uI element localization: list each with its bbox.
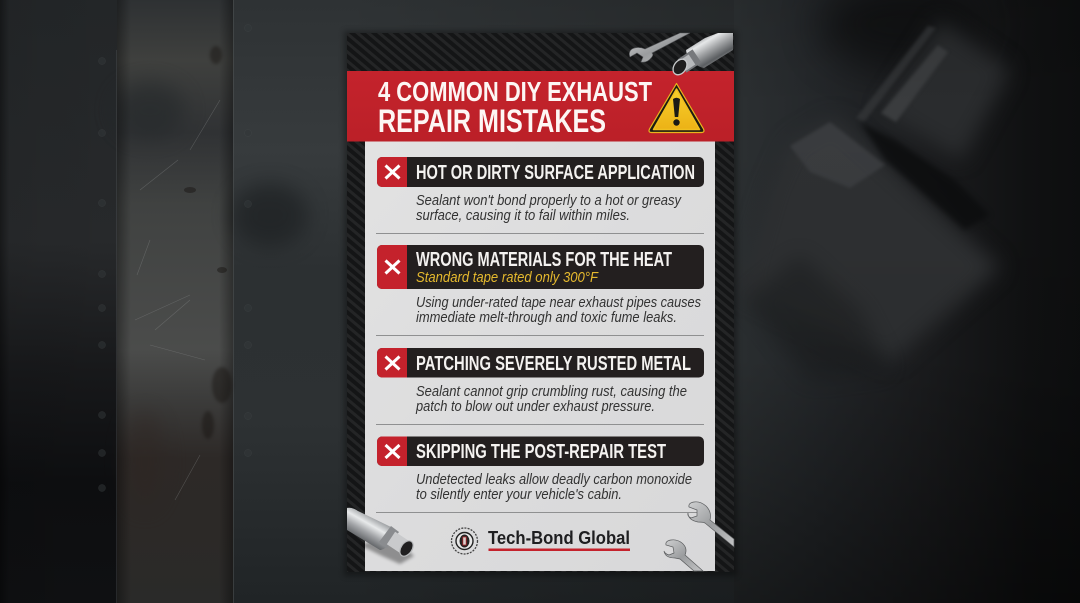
item 1 description — [416, 192, 682, 224]
icon: cross — [386, 166, 400, 178]
illustration: muffler top right — [670, 33, 733, 77]
poster shadow — [344, 31, 737, 576]
icon: cross — [386, 260, 400, 274]
item 4 description: Undetected leaks allow deadly carbon monoxide — [416, 471, 692, 488]
poster frame: carbon fibre — [347, 33, 734, 572]
icon: company seal — [452, 528, 478, 554]
item 2 — [377, 245, 704, 326]
icon: cross — [386, 445, 400, 458]
poster — [344, 31, 737, 576]
title — [378, 76, 652, 139]
item 2 heading bar: WRONG MATERIALS FOR THE HEAT — [416, 249, 672, 271]
item 4 description: to silently enter your vehicle's cabin. — [416, 486, 622, 503]
icon: cross — [386, 356, 400, 370]
item 2 description: immediate melt-through and toxic fume leaks. — [416, 309, 677, 326]
illustration: wrench bottom right large — [688, 502, 734, 547]
item 2 heading bar: Standard tape rated only 300°F — [416, 269, 599, 286]
white content panel — [365, 141, 715, 571]
item 2 description — [416, 294, 701, 326]
grime: rust flecks — [184, 46, 232, 439]
title: 4 COMMON DIY EXHAUST — [378, 76, 652, 107]
item 1 — [377, 157, 704, 224]
item 2 description: Using under-rated tape near exhaust pipes causes — [416, 294, 701, 311]
scratches: worn centre plate — [135, 100, 220, 500]
title: REPAIR MISTAKES — [378, 103, 606, 139]
illustration: muffler bottom left — [347, 508, 416, 564]
title banner — [347, 71, 734, 142]
item 3 heading bar — [377, 348, 704, 378]
illustration: wrench bottom right small — [664, 540, 703, 571]
rivets: plate seams — [98, 24, 252, 492]
item 3 description: Sealant cannot grip crumbling rust, causing the — [416, 383, 687, 400]
brand name: Tech-Bond Global — [488, 528, 630, 548]
item 1 heading bar: HOT OR DIRTY SURFACE APPLICATION — [416, 162, 695, 184]
illustration: wrench top right — [629, 33, 690, 62]
brand underline — [488, 548, 630, 551]
footer: brand — [452, 528, 630, 554]
item 4 heading bar — [377, 436, 704, 466]
item 3 — [377, 348, 704, 415]
item 4 — [377, 436, 704, 503]
item 1 heading bar — [377, 157, 704, 187]
item 1 description: surface, causing it to fail within miles. — [416, 207, 630, 224]
item 3 heading bar: PATCHING SEVERELY RUSTED METAL — [416, 353, 691, 375]
icon: warning triangle — [649, 84, 704, 132]
item 4 heading bar: SKIPPING THE POST-REPAIR TEST — [416, 441, 666, 463]
item 3 description: patch to blow out under exhaust pressure. — [415, 398, 655, 415]
item 2 heading bar — [377, 245, 704, 289]
item 4 description — [416, 471, 692, 503]
item 3 description — [415, 383, 687, 415]
background object: angled cylinder — [741, 0, 1010, 380]
item 1 description: Sealant won't bond properly to a hot or greasy — [416, 192, 682, 209]
